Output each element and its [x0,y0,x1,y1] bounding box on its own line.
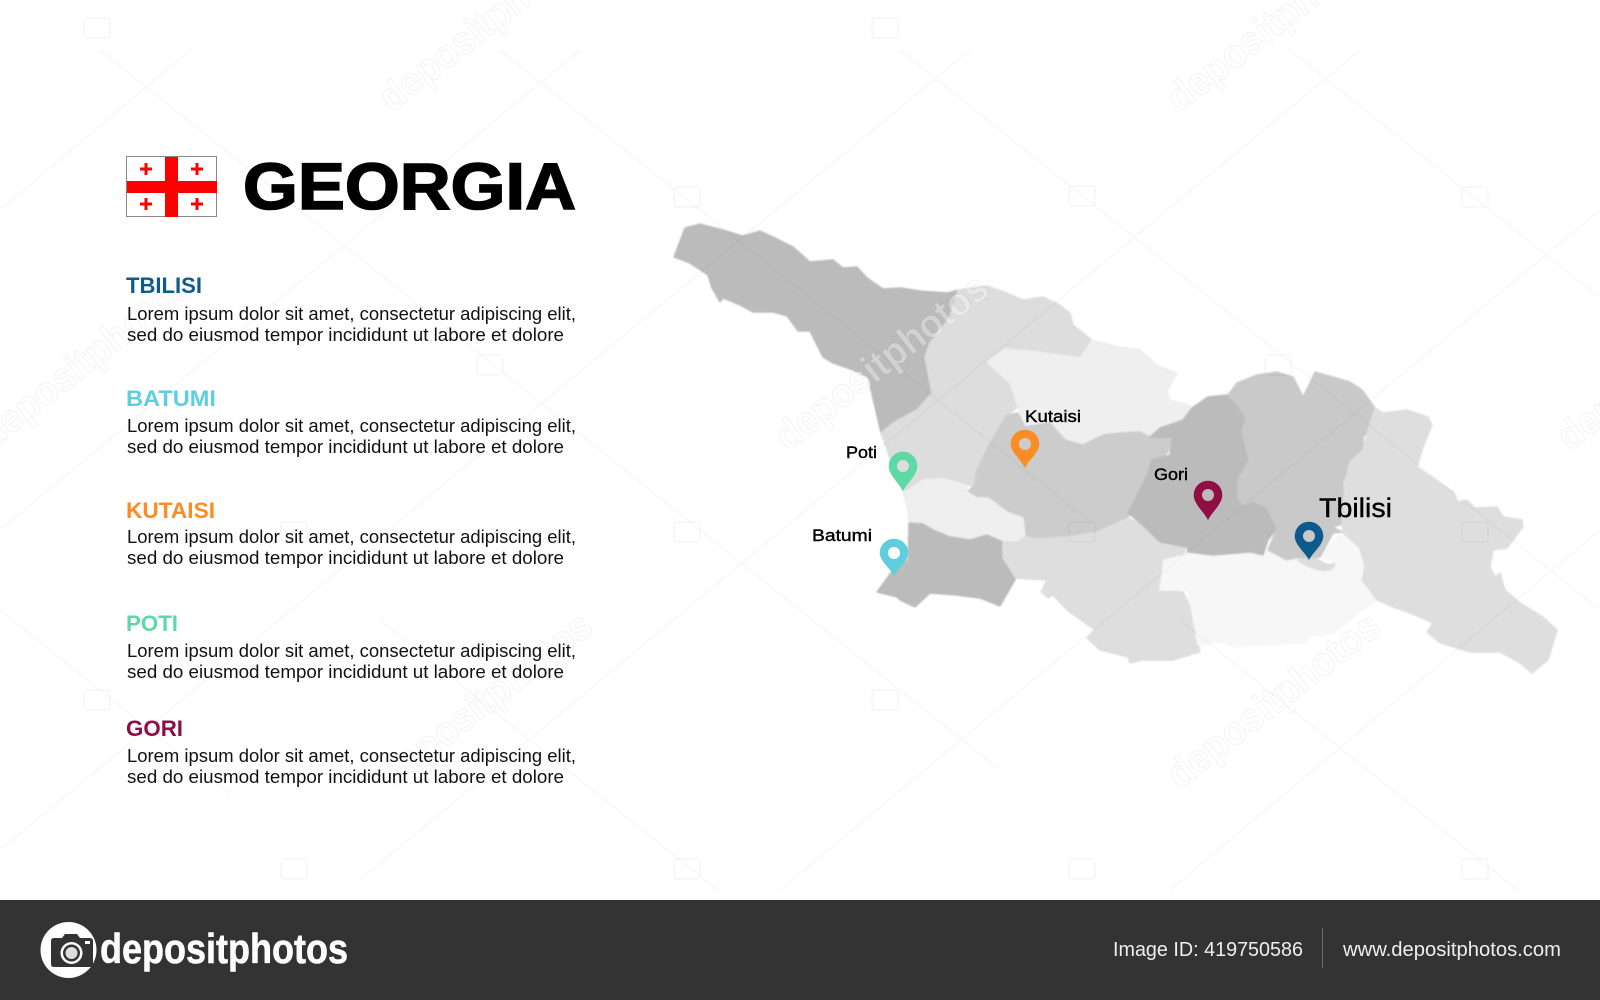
pin: Gori [1194,481,1222,520]
region: Shida Kartli [1128,395,1277,555]
region: Imereti [967,413,1172,539]
pin: Poti [889,452,917,491]
text block: Tbilisi: sed do eiusmod tempor incididunt ut labore et dolore [127,324,564,345]
map label: Kutaisi: Kutaisi [1025,407,1081,426]
watermark overlay: depositphotos [766,266,997,459]
map label: Poti: Poti [846,443,877,462]
region: Kvemo Kartli [1160,535,1377,647]
text block: Kutaisi: KUTAISI [126,498,215,523]
map label: Batumi: Batumi [812,526,872,545]
text block: Poti: Lorem ipsum dolor sit amet, consectetur adipiscing elit, [127,640,576,661]
text block: Poti: POTI [126,611,178,636]
region: Tbilisi district [1296,558,1335,571]
text block: Kutaisi: sed do eiusmod tempor incididunt ut labore et dolore [127,547,564,568]
footer bar [0,900,1600,1000]
region: Guria [903,479,1025,542]
text block: Poti [126,611,576,682]
watermark overlay: depositphotos [1158,604,1389,797]
pin: Kutaisi [1011,430,1039,468]
region: Racha-Lechkhumi [987,340,1192,445]
text block: Poti: sed do eiusmod tempor incididunt ut labore et dolore [127,661,564,682]
website url: www.depositphotos.com [1342,939,1561,961]
region: Mtskheta-Mtianeti [1228,372,1375,560]
watermark overlay: depositphotos [370,604,601,797]
logo wordmark: depositphotos [100,925,348,972]
map of Georgia [674,224,1557,673]
pin: Tbilisi [1295,522,1323,560]
text block: Batumi: sed do eiusmod tempor incididunt ut labore et dolore [127,436,564,457]
text block: Gori [126,716,576,787]
region: Samegrelo-Svaneti [881,286,1092,491]
text block: Kutaisi: Lorem ipsum dolor sit amet, consectetur adipiscing elit, [127,526,576,547]
text block: Gori: sed do eiusmod tempor incididunt ut labore et dolore [127,766,564,787]
region: Kakheti [1342,408,1557,673]
region: Samtskhe-Javakheti [1003,518,1200,663]
region: Abkhazia [674,224,958,433]
image id: Image ID: 419750586 [1113,939,1303,961]
pin: Batumi [880,539,908,576]
text block: Kutaisi [126,498,576,568]
text block: Gori: Lorem ipsum dolor sit amet, consectetur adipiscing elit, [127,745,576,766]
text block: Tbilisi: TBILISI [126,273,202,298]
text block: Batumi: Lorem ipsum dolor sit amet, consectetur adipiscing elit, [127,415,576,436]
text block: Tbilisi: Lorem ipsum dolor sit amet, consectetur adipiscing elit, [127,303,576,324]
flag of Georgia [126,156,217,217]
map label: Tbilisi: Tbilisi [1319,493,1392,523]
text block: Batumi [126,386,576,457]
title: GEORGIA [243,149,576,223]
icon: camera logo [40,922,96,978]
region: Adjara [877,523,1016,607]
text block: Tbilisi [126,273,576,345]
map label: Gori: Gori [1154,465,1188,484]
text block: Batumi: BATUMI [126,386,216,411]
text block: Gori: GORI [126,716,183,741]
